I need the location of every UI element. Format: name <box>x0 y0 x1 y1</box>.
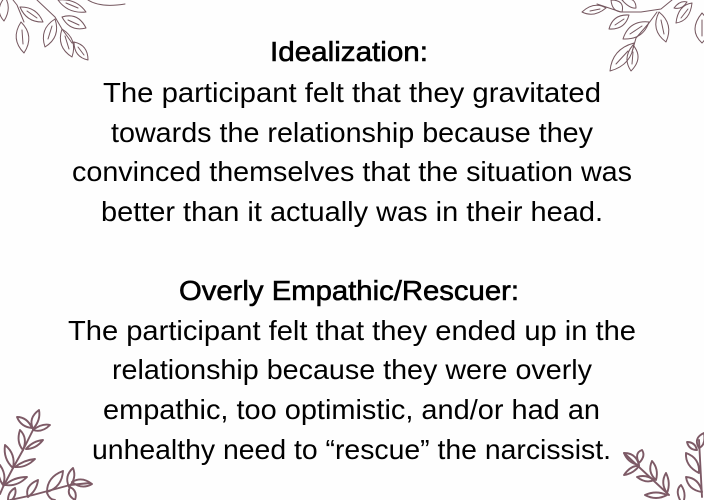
description: Overly Empathic/Rescuer: unhealthy need to “rescue” the narcissist. <box>92 434 611 465</box>
description: Idealization <box>72 77 632 227</box>
description: Idealization: convinced themselves that the situation was <box>72 156 632 187</box>
heading: Idealization: Idealization: <box>270 36 428 67</box>
description: Idealization: towards the relationship because they <box>111 117 593 148</box>
icon: leaf branch bottom-right <box>624 433 704 500</box>
heading: Overly Empathic/Rescuer: Overly Empathic/Rescuer: <box>179 275 519 306</box>
description: Overly Empathic/Rescuer <box>68 315 636 465</box>
description: Overly Empathic/Rescuer: The participant felt that they ended up in the <box>68 315 636 346</box>
icon: leaf branch bottom-left <box>0 410 92 500</box>
description: Overly Empathic/Rescuer: empathic, too optimistic, and/or had an <box>103 394 600 425</box>
text block: Idealization <box>72 36 632 227</box>
icon: leaf branch top-right <box>582 0 704 71</box>
description: Idealization: better than it actually was in their head. <box>101 196 603 227</box>
text block: Overly Empathic/Rescuer <box>68 275 636 465</box>
description: Overly Empathic/Rescuer: relationship because they were overly <box>112 354 592 385</box>
description: Idealization: The participant felt that they gravitated <box>103 77 601 108</box>
icon: leaf branch top-left <box>0 0 125 60</box>
